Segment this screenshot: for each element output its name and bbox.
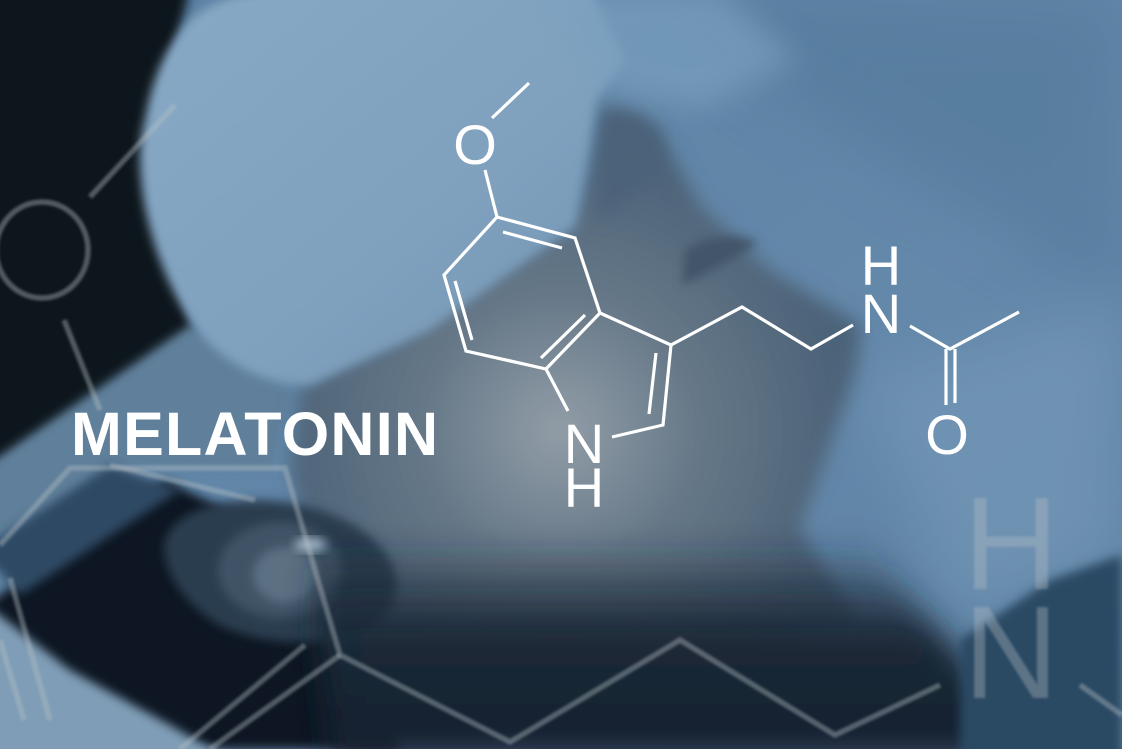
headband (0, 325, 290, 550)
dark hair (0, 0, 195, 480)
bonds (444, 83, 1019, 437)
surgical cap (140, 0, 625, 385)
atom labels: N (861, 282, 901, 345)
atom labels: H (861, 234, 901, 297)
dark collar and shoulder (310, 540, 1010, 749)
ghost molecule letters (963, 470, 1059, 726)
atom labels: O (453, 113, 497, 176)
face and neck (290, 110, 862, 660)
ghost molecule letters: H (963, 470, 1059, 617)
ear (164, 500, 396, 642)
eye socket (600, 107, 662, 225)
lower left dark band (0, 480, 400, 749)
title: MELATONIN (71, 400, 438, 468)
atom labels: H (564, 456, 604, 519)
atom labels (453, 113, 969, 519)
ghost molecule letters: N (963, 579, 1059, 726)
lips (682, 237, 758, 285)
melatonin structural formula (444, 83, 1019, 519)
atom labels: N (564, 412, 604, 475)
atom labels: O (925, 403, 969, 466)
